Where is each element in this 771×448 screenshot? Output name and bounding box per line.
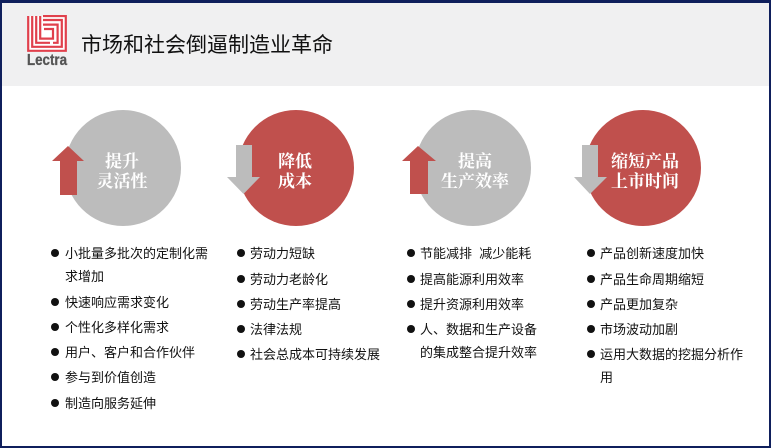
bullet list: flexibility: 个性化多样化需求 xyxy=(65,320,169,335)
bullet list: cost: 社会总成本可持续发展 xyxy=(250,347,380,362)
bullet list: flexibility: 求增加 xyxy=(65,269,104,284)
item 3: raise production efficiency circle and arrow: 生产效率 xyxy=(441,172,509,191)
bullet list: efficiency: 人、数据和生产设备 xyxy=(420,322,537,337)
item 2: lower cost circle and arrow: 降低 xyxy=(278,152,312,171)
header band xyxy=(2,3,769,86)
bullet list: time to market: 产品更加复杂 xyxy=(600,297,678,312)
bullet list: flexibility: 用户、客户和合作伙伴 xyxy=(65,345,195,360)
item 4: shorten time to market circle and arrow: 缩短产品 xyxy=(611,152,679,171)
bullet list: cost: 法律法规 xyxy=(250,322,302,337)
item 2: lower cost circle and arrow: 成本 xyxy=(278,172,312,191)
logo: Lectra xyxy=(27,15,68,68)
bullet list: efficiency: 提高能源利用效率 xyxy=(420,272,524,287)
item 1: raise flexibility circle and arrow: 提升 xyxy=(105,152,139,171)
item 3: raise production efficiency circle and arrow: 提高 xyxy=(458,152,492,171)
bullet list: efficiency: 提升资源利用效率 xyxy=(420,297,524,312)
bullet list: time to market: 运用大数据的挖掘分析作 xyxy=(600,347,743,362)
bullet list: time to market: 产品生命周期缩短 xyxy=(600,272,704,287)
bullet list: flexibility: 快速响应需求变化 xyxy=(65,295,169,310)
bullet list: flexibility: 小批量多批次的定制化需 xyxy=(65,246,208,261)
item 4: shorten time to market circle and arrow: 上市时间 xyxy=(611,172,679,191)
bullet list: cost: 劳动生产率提高 xyxy=(250,297,341,312)
bullet list: efficiency: 节能减排 减少能耗 xyxy=(420,246,531,261)
bullet list: cost: 劳动力老龄化 xyxy=(250,272,328,287)
bullet list: time to market: 用 xyxy=(600,370,613,385)
bullet list: time to market: 市场波动加剧 xyxy=(600,322,678,337)
title: 市场和社会倒逼制造业革命 xyxy=(81,34,333,57)
bullet list: flexibility: 参与到价值创造 xyxy=(65,370,156,385)
bullet list: cost: 劳动力短缺 xyxy=(250,246,315,261)
item 1: raise flexibility circle and arrow: 灵活性 xyxy=(96,172,148,191)
bullet list: flexibility: 制造向服务延伸 xyxy=(65,396,156,411)
bullet list: efficiency: 的集成整合提升效率 xyxy=(420,345,537,360)
bullet list: time to market: 产品创新速度加快 xyxy=(600,246,704,261)
